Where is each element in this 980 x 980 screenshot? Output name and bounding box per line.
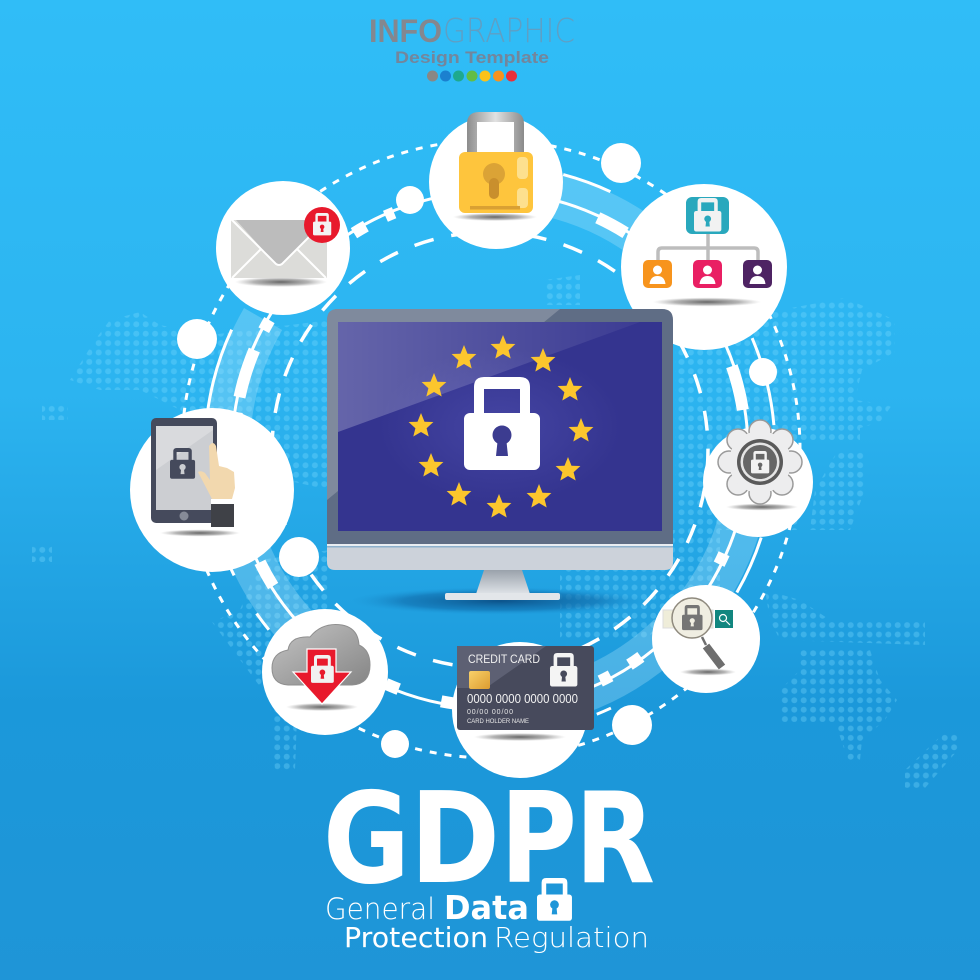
translucent band segments — [120, 80, 860, 820]
title: GDPR: D — [410, 765, 500, 912]
icon: credit card — [452, 642, 594, 778]
icon: credit card: CREDIT CARD — [468, 652, 540, 666]
icon: access hierarchy — [621, 184, 787, 350]
icon: cloud download — [262, 609, 388, 735]
icon: security gear — [703, 420, 813, 537]
subtitle: Protection — [344, 921, 488, 954]
icon: credit card: 0000 0000 0000 0000 — [467, 692, 578, 706]
small connector nodes — [177, 143, 777, 758]
subtitle — [325, 878, 649, 954]
central lock — [464, 377, 540, 470]
template header: GRAPHIC — [443, 12, 575, 50]
title: GDPR: G — [323, 765, 410, 912]
subtitle: General — [325, 892, 435, 926]
color dots — [427, 70, 517, 82]
icon: tablet with hand — [130, 408, 294, 572]
icon: credit card: CARD HOLDER NAME — [467, 718, 530, 725]
EU stars — [409, 335, 593, 518]
icon: credit card: 00/00 00/00 — [467, 709, 513, 716]
title: GDPR: R — [575, 765, 655, 912]
template header: Design Template — [395, 48, 549, 67]
monitor body — [327, 309, 673, 544]
subtitle: Data — [444, 888, 529, 927]
icon: magnifier search — [652, 585, 760, 693]
icon: padlock — [429, 112, 563, 249]
template header — [369, 12, 575, 82]
person tile: orange — [643, 260, 672, 288]
secondary arc segments — [89, 49, 891, 851]
connector rings — [89, 49, 891, 851]
main solid ring — [232, 192, 748, 708]
title: GDPR — [323, 765, 655, 912]
title: GDPR: P — [500, 765, 577, 912]
monitor — [327, 309, 673, 615]
person tile: purple — [743, 260, 772, 288]
monitor shadow — [350, 587, 650, 615]
subtitle: Regulation — [494, 921, 649, 954]
monitor stand — [476, 570, 530, 594]
icon: subtitle lock — [537, 878, 572, 921]
template header: INFO — [369, 13, 442, 49]
thick ring blocks — [132, 92, 848, 808]
outer dashed ring — [182, 140, 800, 758]
person tile: pink — [693, 260, 722, 288]
monitor screen — [338, 322, 662, 531]
icon: locked email — [216, 181, 350, 315]
world map dots — [32, 275, 958, 788]
inner dashed ring — [272, 232, 708, 668]
